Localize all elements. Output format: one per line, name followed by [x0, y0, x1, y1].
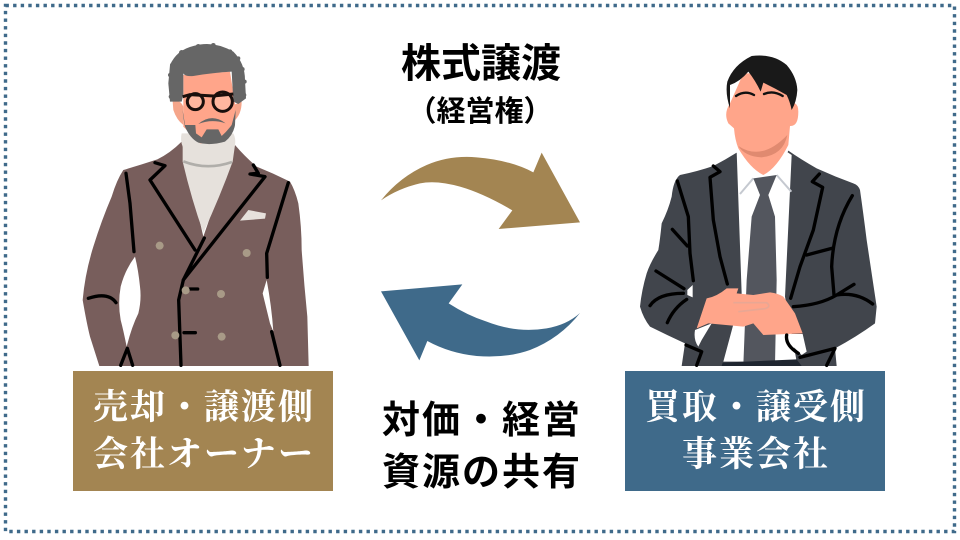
tie [743, 175, 777, 365]
face [183, 72, 235, 143]
label box: buyer [625, 371, 885, 491]
coat lines [88, 163, 288, 365]
label box: buyer: 買取・譲受側 [645, 388, 867, 427]
beard [183, 110, 236, 144]
pocket square [240, 210, 266, 221]
arrow: consideration [381, 284, 580, 360]
seller man illustration [83, 43, 309, 366]
cuffs [687, 285, 807, 355]
arrow: share transfer [381, 153, 580, 229]
heading: share transfer: 株式譲渡 [401, 42, 561, 86]
arm gaps [119, 257, 273, 347]
glasses [187, 92, 232, 111]
label box: seller: 売却・譲渡側 [93, 388, 315, 427]
coat lines [650, 166, 873, 365]
shirt [723, 152, 797, 362]
hair [168, 43, 247, 104]
heading: management resources: 資源の共有 [382, 452, 582, 494]
buttons [156, 242, 251, 341]
label box: seller: 会社オーナー [93, 435, 315, 474]
label box: buyer: 事業会社 [682, 435, 830, 474]
ears and face [726, 73, 798, 175]
heading: consideration: 対価・経営 [382, 400, 582, 442]
buyer man illustration [640, 56, 877, 366]
eyebrows [736, 92, 783, 96]
ears [173, 101, 242, 125]
hair [727, 56, 797, 110]
jacket [83, 142, 309, 366]
hands [697, 288, 803, 335]
label box: seller [73, 371, 333, 491]
collar [740, 175, 791, 194]
subheading: management rights: （経営権） [407, 95, 553, 128]
turtleneck [181, 133, 235, 233]
jacket [640, 151, 877, 366]
